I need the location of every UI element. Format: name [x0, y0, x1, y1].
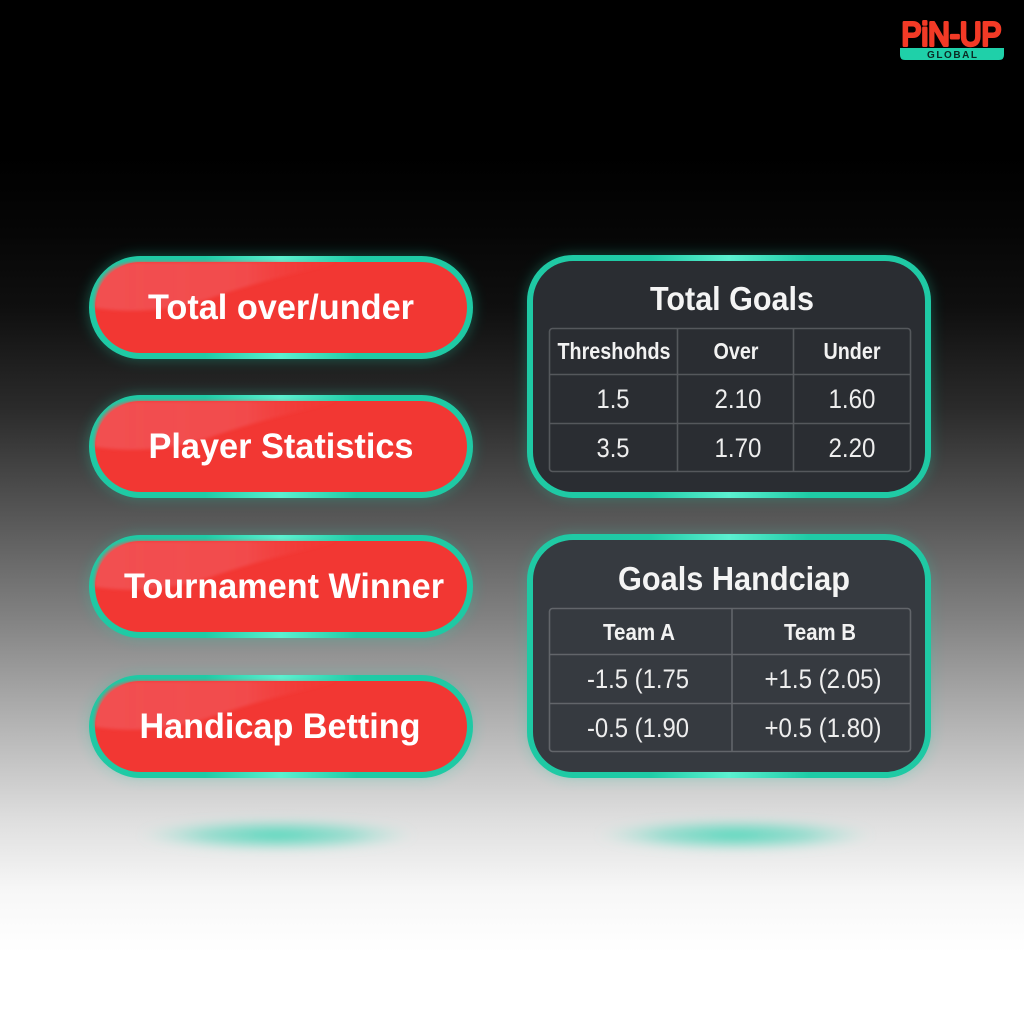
pill button: Handicap Betting: Handicap Betting: [140, 707, 420, 746]
logo: Pin-Up Global: GLOBAL: [927, 50, 977, 61]
table: Total Goals odds: Over: [714, 338, 759, 364]
pill button: Handicap Betting: [89, 675, 473, 778]
heading: Total Goals: Total Goals: [650, 280, 814, 317]
table: Total Goals odds: 1.60: [828, 384, 876, 414]
table: Total Goals odds: 2.10: [714, 384, 762, 414]
table: Goals Handicap odds: Team A: [603, 619, 675, 645]
panel: Total Goals: [527, 255, 931, 498]
table: Goals Handicap odds: +0.5 (1.80): [764, 713, 882, 743]
pill button: Player Statistics: [89, 395, 473, 498]
pill button: Tournament Winner: Tournament Winner: [124, 567, 444, 606]
floor glow under left column: [139, 819, 415, 851]
table: Total Goals odds: 1.5: [596, 384, 630, 414]
table: Goals Handicap odds: Team B: [784, 619, 856, 645]
table: Goals Handicap odds: -0.5 (1.90: [587, 713, 689, 743]
table: Total Goals odds: 2.20: [828, 433, 876, 463]
pill button: Tournament Winner: [89, 535, 473, 638]
pill button: Total over/under: Total over/under: [148, 288, 414, 327]
table: Goals Handicap odds: [550, 608, 910, 752]
table: Total Goals odds: Threshohds: [558, 338, 670, 364]
panel: Goals Handicap: [527, 534, 931, 778]
pill button: Total over/under: [89, 256, 473, 359]
table: Total Goals odds: 1.70: [714, 433, 762, 463]
heading: Goals Handciap: Goals Handciap: [618, 560, 850, 597]
table: Total Goals odds: [550, 328, 910, 472]
table: Goals Handicap odds: -1.5 (1.75: [587, 664, 689, 694]
table: Total Goals odds: Under: [824, 338, 881, 364]
logo: Pin-Up Global: PiN-UP: [902, 16, 1002, 52]
floor glow under right column: [597, 819, 873, 851]
table: Goals Handicap odds: +1.5 (2.05): [764, 664, 882, 694]
pill button: Player Statistics: Player Statistics: [148, 427, 414, 466]
table: Total Goals odds: 3.5: [596, 433, 630, 463]
